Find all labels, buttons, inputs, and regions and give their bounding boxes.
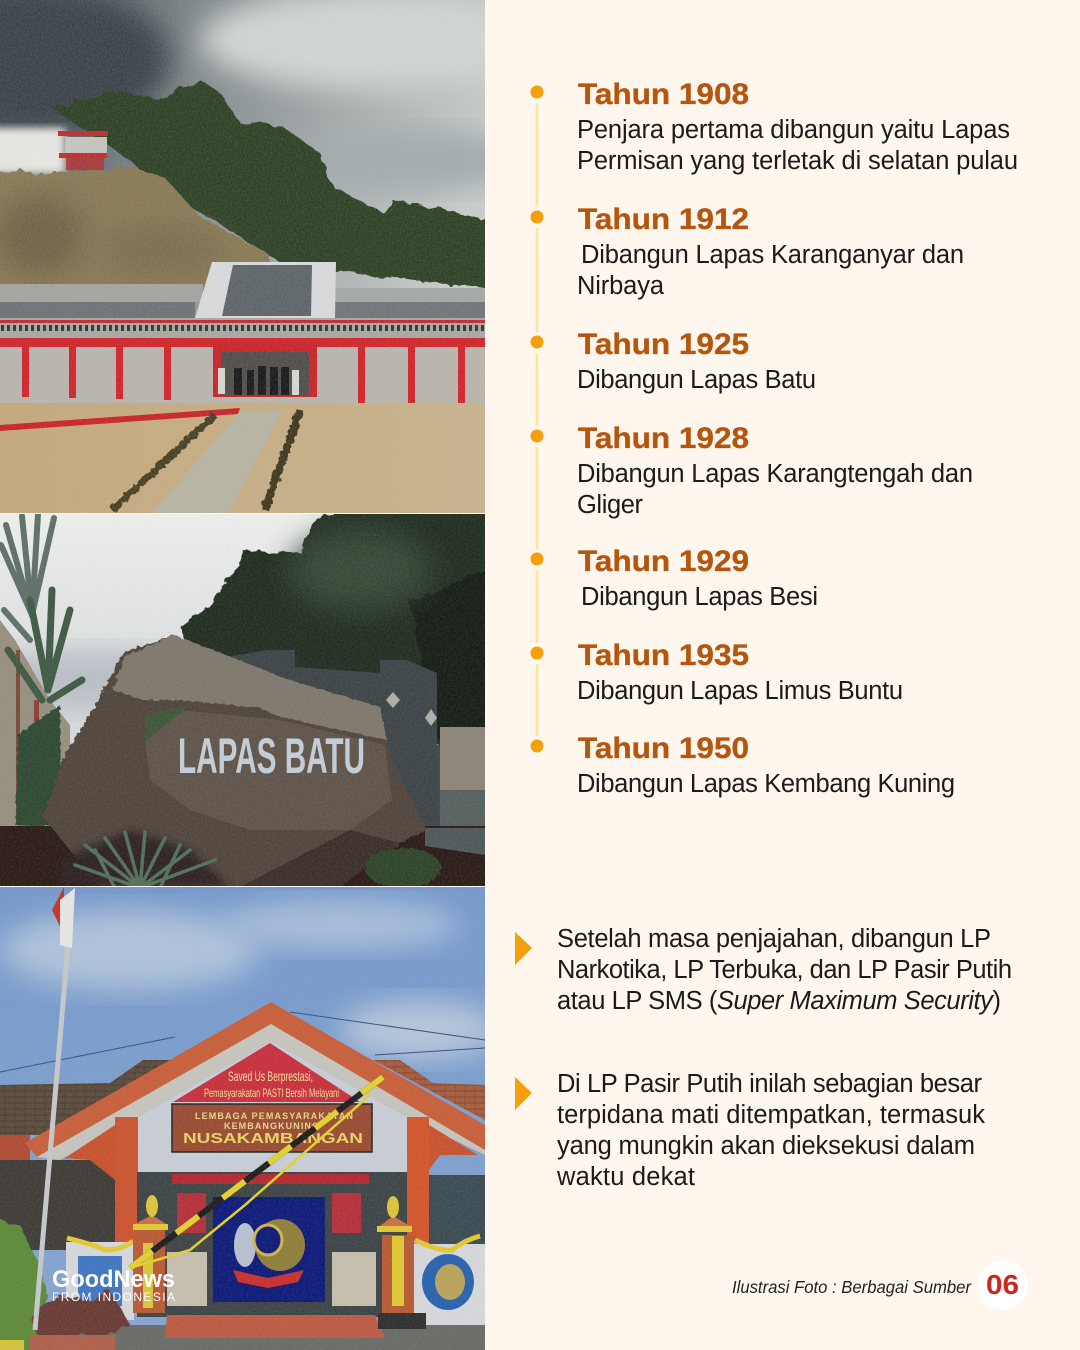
- white boundary walls: [66, 1236, 485, 1326]
- photo credit: Ilustrasi Foto : Berbagai Sumber: [732, 1277, 972, 1297]
- timeline entry 1928: Dibangun Lapas Karangtengah dan: [577, 460, 973, 488]
- timeline entry 1908: Penjara pertama dibangun yaitu Lapas: [577, 116, 1010, 144]
- photo: Lapas Batu rock sign: [0, 514, 485, 886]
- brown name board: LEMBAGA PEMASYARAKATAN: [195, 1111, 353, 1121]
- timeline entry 1935: [530, 639, 903, 705]
- gate pillars: [133, 1195, 414, 1313]
- brown name board: NUSAKAMBANGAN: [183, 1130, 363, 1147]
- note: LP Pasir Putih: terpidana mati ditempatkan, termasuk: [557, 1101, 985, 1129]
- rock inscription: LAPAS BATU: [178, 728, 365, 784]
- barrier arm: [130, 1077, 383, 1268]
- garden plants: [0, 1215, 130, 1350]
- timeline entry 1912: Nirbaya: [577, 272, 665, 300]
- timeline entry 1950: [530, 732, 955, 798]
- timeline entry 1925: [530, 328, 816, 394]
- timeline rail: [536, 103, 538, 736]
- note: after the colonial period: Setelah masa penjajahan, dibangun LP: [557, 925, 991, 953]
- note: LP Pasir Putih: [515, 1070, 985, 1191]
- timeline entry 1908: Permisan yang terletak di selatan pulau: [577, 147, 1018, 175]
- timeline entry 1929: Tahun 1929: [578, 545, 749, 578]
- note: after the colonial period: Narkotika, LP Terbuka, dan LP Pasir Putih: [557, 956, 1012, 984]
- timeline entry 1908: [530, 78, 1018, 175]
- timeline entry 1912: [530, 203, 964, 300]
- timeline entry 1935: Dibangun Lapas Limus Buntu: [577, 677, 903, 705]
- timeline entry 1950: Dibangun Lapas Kembang Kuning: [577, 770, 955, 798]
- timeline entry 1912: Tahun 1912: [578, 203, 749, 236]
- logo: GoodNews from Indonesia: FROM INDONESIA: [52, 1290, 175, 1304]
- logo: GoodNews from Indonesia: GoodNews: [52, 1266, 175, 1293]
- note: LP Pasir Putih: waktu dekat: [556, 1163, 695, 1191]
- red banner: Saved Us Berprestasi,: [228, 1068, 313, 1084]
- logo: GoodNews from Indonesia: [53, 1270, 175, 1301]
- flag pole and flag: [35, 887, 75, 1330]
- blue door with emblem: [213, 1197, 325, 1302]
- brown name board: [172, 1104, 372, 1152]
- page number badge: [978, 1260, 1028, 1310]
- people: [218, 366, 299, 395]
- note: after the colonial period: atau LP SMS (Super Maximum Security): [557, 987, 1001, 1015]
- timeline entry 1928: [530, 422, 973, 519]
- timeline entry 1925: Tahun 1925: [578, 328, 749, 361]
- timeline entry 1928: Gliger: [577, 491, 644, 519]
- brown name board: KEMBANGKUNING: [224, 1121, 319, 1131]
- timeline entry 1912: Dibangun Lapas Karanganyar dan: [581, 241, 964, 269]
- photo: prison building below a hill: [0, 0, 485, 513]
- timeline entry 1929: Dibangun Lapas Besi: [581, 583, 818, 611]
- timeline entry 1950: Tahun 1950: [578, 732, 749, 765]
- timeline entry 1929: [530, 545, 818, 611]
- shrubs: [75, 832, 441, 888]
- timeline entry 1925: Dibangun Lapas Batu: [577, 366, 816, 394]
- page number badge: 06: [986, 1269, 1019, 1300]
- note: LP Pasir Putih: Di LP Pasir Putih inilah sebagian besar: [557, 1070, 982, 1098]
- photo: Kembangkuning Nusakambangan prison gate: [0, 887, 500, 1350]
- note: after the colonial period: [515, 925, 1012, 1015]
- gable roof: [25, 1002, 485, 1160]
- watchtower: [58, 131, 108, 170]
- palm tree: [1, 514, 82, 826]
- timeline entry 1908: Tahun 1908: [578, 78, 749, 111]
- red banner: Pemasyarakatan PASTI Bersih Melayani: [204, 1086, 339, 1100]
- timeline entry 1935: Tahun 1935: [578, 639, 749, 672]
- boulder: [43, 635, 427, 887]
- red banner: [173, 1043, 360, 1102]
- timeline entry 1928: Tahun 1928: [578, 422, 749, 455]
- red entrance ramp: [165, 1315, 385, 1338]
- note: LP Pasir Putih: yang mungkin akan dieksekusi dalam: [557, 1132, 975, 1160]
